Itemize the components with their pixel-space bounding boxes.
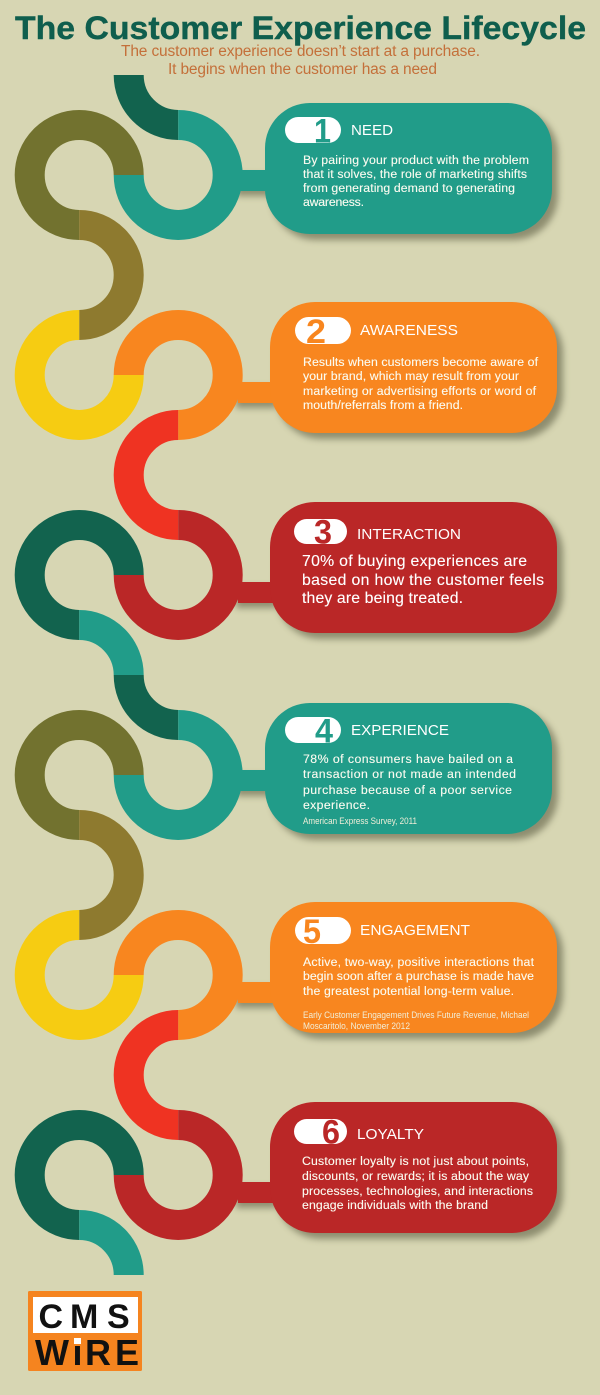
panel: experience: 78% of consumers have bailed on a (303, 752, 513, 766)
logo: CMS Wire (28, 1291, 142, 1373)
panel: need: NEED (351, 122, 393, 139)
panel: interaction: 70% of buying experiences are (302, 553, 527, 570)
panel: loyalty: discounts, or rewards; it is about the way (302, 1169, 530, 1183)
panel: engagement: ENGAGEMENT (360, 922, 470, 939)
panel: experience: American Express Survey, 2011 (303, 816, 417, 826)
panel: awareness (238, 302, 557, 433)
panel: interaction (238, 502, 557, 633)
logo: CMS Wire: WiRE (35, 1332, 139, 1373)
panel: engagement: the greatest potential long-term value. (303, 984, 514, 998)
panel: awareness: AWARENESS (360, 322, 458, 339)
panel: experience (238, 703, 552, 834)
panel: interaction: INTERACTION (357, 526, 461, 543)
panel: need: from generating demand to generating (303, 181, 515, 195)
ribbon: upper winding path (30, 75, 228, 675)
panel: loyalty: engage individuals with the brand (302, 1198, 488, 1212)
panel: experience: purchase because of a poor service (303, 783, 512, 797)
panel: engagement (238, 902, 557, 1033)
panel: interaction: they are being treated. (302, 590, 463, 607)
panel: engagement: Active, two-way, positive interactions that (303, 955, 535, 969)
panel: awareness: Results when customers become aware of (303, 355, 539, 369)
panel: need: that it solves, the role of marketing shifts (303, 167, 527, 181)
ribbon: lower winding path (30, 675, 228, 1275)
title: The Customer Experience Lifecycle (15, 10, 586, 46)
panel: experience: experience. (303, 798, 370, 812)
subtitle: The customer experience doesn’t start at a purchase. (121, 43, 480, 60)
panel: loyalty: processes, technologies, and interactions (302, 1184, 533, 1198)
panel: need: By pairing your product with the problem (303, 153, 529, 167)
panel: awareness: your brand, which may result from your (303, 369, 519, 383)
panel: awareness: marketing or advertising efforts or word of (303, 384, 537, 398)
panel: awareness: 2 (306, 313, 326, 351)
panel: need: awareness. (303, 195, 364, 209)
card shadows (236, 109, 563, 1239)
panel: awareness: mouth/referrals from a friend. (303, 398, 463, 412)
panel: interaction: based on how the customer feels (302, 572, 544, 589)
panel: interaction: 3 (314, 514, 332, 552)
panel: loyalty: Customer loyalty is not just about points, (302, 1154, 529, 1168)
subtitle: It begins when the customer has a need (168, 61, 437, 78)
panel: engagement: Moscaritolo, November 2012 (303, 1021, 410, 1031)
panel: need: 1 (314, 112, 331, 150)
logo: CMS Wire: CMS (38, 1298, 130, 1336)
panel: loyalty (238, 1102, 557, 1233)
panel: loyalty: 6 (322, 1114, 340, 1152)
panel: engagement: Early Customer Engagement Drives Future Revenue, Michael (303, 1010, 529, 1020)
panel: engagement: 5 (303, 913, 321, 951)
panel: experience: 4 (315, 712, 333, 750)
panel: experience: EXPERIENCE (351, 722, 449, 739)
panel: engagement: begin soon after a purchase is made have (303, 969, 534, 983)
panel: loyalty: LOYALTY (357, 1126, 424, 1143)
subtitle (121, 43, 480, 78)
panel: experience: transaction or not made an intended (303, 767, 516, 781)
panel: need (238, 103, 552, 234)
